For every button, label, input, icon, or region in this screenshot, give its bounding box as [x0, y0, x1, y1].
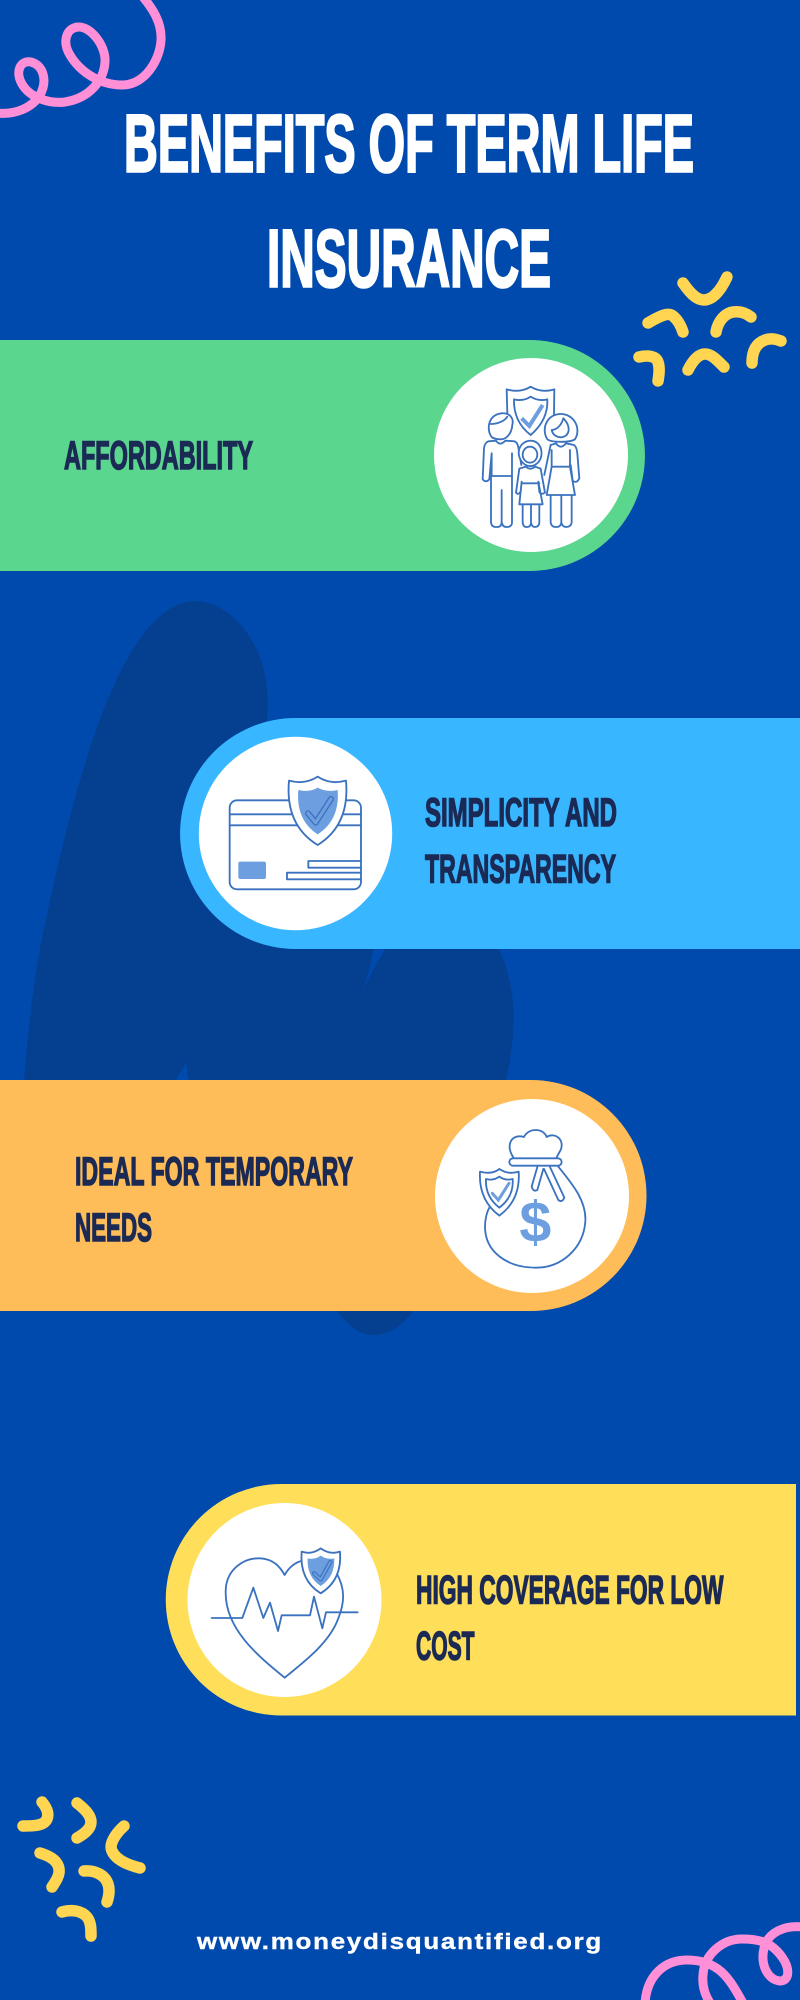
title: INSURANCE	[267, 214, 551, 304]
heading: ideal for temporary needs	[75, 1150, 353, 1250]
heading: ideal for temporary needs: IDEAL FOR TEMPORARY	[75, 1150, 353, 1194]
panel: high coverage for low cost	[166, 1484, 796, 1716]
heading: high coverage for low cost: COST	[416, 1624, 474, 1668]
decorative yellow dashes top right	[639, 277, 781, 381]
heading: simplicity and transparency	[425, 791, 617, 892]
heading: high coverage for low cost	[416, 1568, 724, 1668]
white circle	[434, 358, 628, 552]
blue bar	[180, 718, 800, 949]
decorative pink squiggle top left	[0, 0, 161, 113]
icon: credit card with shield	[230, 777, 361, 889]
title	[124, 98, 694, 304]
decorative pink squiggle bottom right	[645, 1927, 800, 2000]
heading: affordability: AFFORDABILITY	[64, 434, 253, 478]
heading: simplicity and transparency: SIMPLICITY AND	[425, 791, 617, 835]
white circle	[188, 1503, 382, 1697]
website url: www.moneydisquantified.org	[196, 1929, 603, 1954]
icon: heart with pulse and shield	[212, 1548, 358, 1678]
icon: money bag with shield: $	[519, 1191, 551, 1255]
green bar	[0, 340, 645, 571]
yellow bar	[166, 1484, 796, 1716]
panel: simplicity and transparency	[180, 718, 800, 949]
decorative yellow dashes bottom left	[23, 1802, 140, 1936]
orange bar	[0, 1080, 646, 1311]
icon: money bag with shield	[480, 1130, 585, 1268]
icon: family with shield	[483, 387, 579, 527]
white circle	[435, 1099, 629, 1293]
panel: affordability	[0, 340, 645, 571]
heading: ideal for temporary needs: NEEDS	[75, 1206, 152, 1250]
heading: simplicity and transparency: TRANSPARENCY	[425, 848, 616, 892]
panel: ideal for temporary needs	[0, 1080, 646, 1311]
white circle	[199, 737, 392, 930]
background dark blob shape	[24, 601, 514, 1335]
